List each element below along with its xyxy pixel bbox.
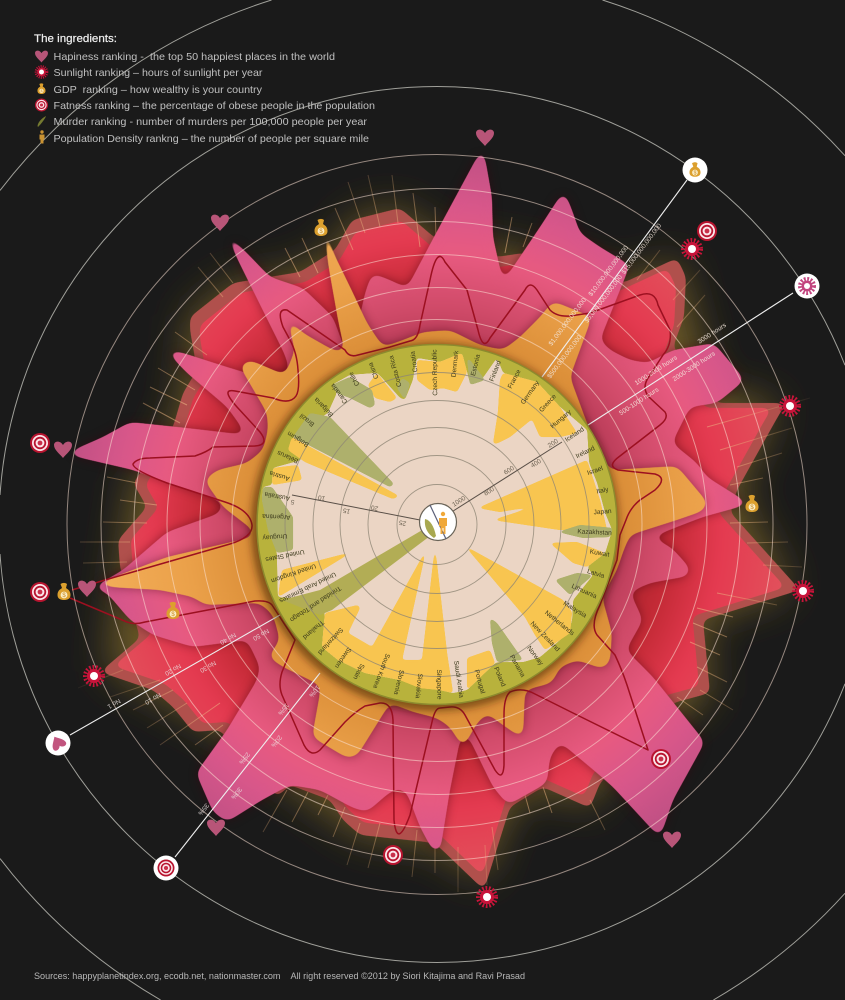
country labels: Portugal [473,669,486,695]
density axis: 600 [503,465,516,477]
radial scale rings [67,154,807,894]
axis: fatness: 10% [307,684,321,698]
axis: sunlight: 500-1000 hours [618,386,661,417]
country labels: Netherlands [543,610,576,638]
country labels: Slovakia [414,673,423,699]
country labels: Slovenia [392,669,405,696]
legend item: GDP: GDP ranking – how wealthy is your country [54,84,263,96]
white icon: target [154,856,178,880]
sun markers [86,240,812,906]
axis: GDP: $1,000,000,000,000 [548,297,588,347]
country labels: Austria [269,469,291,482]
legend item: fatness: Fatness ranking – the percentage of obese people in the population [54,100,375,112]
country labels: Panama [508,654,526,679]
country labels: Croatia [410,350,420,373]
axis: GDP: $10,000,000,000,000 [588,244,630,298]
disc shadow [251,343,619,711]
axis: fatness: 30% [229,786,243,800]
country labels: Saudi Arabia [452,660,464,699]
country labels: Lithuania [570,583,598,600]
white icon: money bag [682,158,708,182]
country labels: Italy [596,486,610,496]
country labels: Denmark [451,350,460,378]
country labels: Trinidad and Tobago [288,584,342,623]
murder spikes [262,358,613,662]
murder axis: 10 [317,493,326,502]
centre hub icon [420,504,456,540]
country labels: Poland [492,666,507,688]
footer sources: Sources: happyplanetindex.org, ecodb.net, nationmaster.com All right reserved ©2012 by Siori Kitajima and Ravi Prasad [34,971,525,981]
axis: happiness [70,615,280,735]
heart markers [54,130,681,848]
legend item: sunlight: Sunlight ranking – hours of sunlight per year [54,67,263,79]
axis: GDP [542,180,687,380]
axis: GDP: $5,000,000,000,000 [584,274,624,324]
country labels: Brazil [298,411,316,428]
legend [34,33,375,145]
country labels [262,349,612,700]
country labels: Israel [586,465,604,477]
axis: sunlight: 1000-2000 hours [634,354,679,387]
sunlight rays [78,175,810,892]
axis: GDP: $15,000,000,000,000 [621,222,663,276]
country labels: New Zealand [529,620,561,653]
happiness ranking: pink area [64,146,750,852]
GDP ranking: orange area [90,228,708,758]
country labels: Switzerland [316,626,344,656]
country labels: Kazakhstan [577,528,612,537]
axis: happiness: No 50 [251,627,270,642]
country labels: Spain [351,662,365,681]
country labels: Estonia [470,353,482,377]
country labels: Singapore [435,669,443,700]
axis: GDP: $500,000,000,000 [546,334,584,380]
country labels: Iceland [564,426,586,444]
country labels: Thailand [301,619,325,640]
axis: happiness: No 1 [106,697,121,710]
country labels: Germany [520,379,541,406]
legend item: happiness: Hapiness ranking - the top 50 happiest places in the world [54,51,335,63]
country labels: Canada [329,382,349,405]
legend item: murder: Murder ranking - number of murders per 100,000 people per year [54,116,368,128]
country labels: Chile [348,370,361,387]
axis: happiness: No 10 [143,691,162,706]
central disc [257,344,617,704]
country labels: Sweden [333,646,352,670]
country labels: Argentina [262,512,291,520]
density axis: 800 [483,486,496,498]
axis: fatness: 25% [237,751,251,765]
country labels: Japan [593,508,612,516]
white icon: heart [46,730,70,756]
country labels: Finland [489,360,503,383]
disc base [257,344,617,704]
murder axis: 5 [290,498,295,505]
country labels: Greece [538,393,558,414]
murder axis: 25 [398,518,407,527]
white icon: sun [794,274,820,298]
axis: fatness: 20% [269,734,283,748]
axis: fatness: 15% [276,702,290,716]
density axis: 200 [547,438,560,450]
population density spikes [272,353,607,693]
country labels: Ireland [575,445,596,460]
axis: fatness [175,673,321,857]
density axis: 1000 [451,495,468,509]
country labels: Belgium [286,429,310,448]
money bag markers [58,219,758,619]
inner scale rings [285,372,589,676]
country labels: Australia [264,490,291,502]
axis: sunlight [588,293,793,425]
target markers [30,221,717,865]
country labels: China [367,361,381,380]
murder spike: Trinidad [282,529,430,615]
country labels: Czech Republic [431,349,439,396]
axis: happiness: No 40 [218,631,237,646]
country labels: France [507,368,523,390]
axis: sunlight: 2000-3000 hours [672,350,717,383]
country labels: Hungary [549,408,573,430]
murder axis: 15 [342,506,351,515]
density axis: 400 [530,458,543,470]
axis: sunlight: 3000 hours [697,322,728,346]
axis: happiness: No 30 [198,659,217,674]
density axis [450,438,562,513]
disc beige field [262,353,612,693]
sunlight ranking: red area [100,208,800,890]
murder axis: 20 [370,503,379,512]
country labels: Uruguay [262,532,288,541]
country labels: Malaysia [562,600,588,620]
country labels: Costa Rica [388,354,403,388]
country labels: United Arab Emirates [277,570,337,604]
country labels: South Korea [371,652,391,689]
legend title: The ingredients: [34,33,117,45]
country labels: Bulgaria [313,396,335,418]
legend item: population: Population Density rankng – the number of people per square mile [54,133,369,145]
murder axis [290,493,420,527]
country labels: Norway [525,645,545,668]
country labels: United Kingdom [270,562,317,584]
country labels: United States [264,548,305,563]
glow behind the chart [108,208,790,880]
axis: happiness: No 20 [163,662,182,677]
axis: fatness: 35% [196,802,210,816]
fatness ranking line [70,256,670,834]
country labels: Kuwait [589,548,610,559]
country labels: Latvia [586,568,605,580]
country labels: Belarus [276,448,300,464]
